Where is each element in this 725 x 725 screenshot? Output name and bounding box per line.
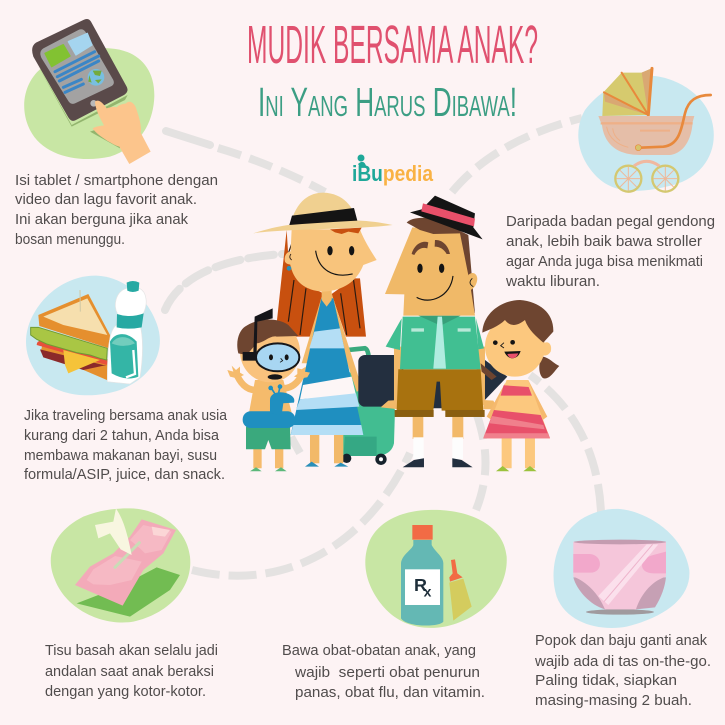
text: medicine: panas, obat flu, dan vitamin. (295, 685, 485, 701)
icon: medicine bottle: R (414, 575, 427, 595)
travel bag (358, 355, 507, 408)
text: diaper: wajib ada di tas on-the-go. (534, 654, 711, 670)
text: tablet: Isi tablet / smartphone dengan (15, 173, 218, 189)
father (381, 196, 498, 467)
text: tablet (15, 173, 218, 248)
panel: wet wipes (51, 508, 190, 623)
suitcase (342, 348, 395, 465)
text: tablet: Ini akan berguna jika anak (15, 212, 189, 228)
text: medicine: Bawa obat-obatan anak, yang (282, 643, 476, 659)
icon: medicine bottle (401, 525, 443, 626)
text: wet wipes: Tisu basah akan selalu jadi (45, 643, 218, 659)
icon: water bottle (107, 281, 146, 384)
text: diaper (534, 633, 711, 709)
icon: medicine bottle: x (424, 583, 432, 599)
logo: ibupedia: iBupedia (352, 161, 434, 186)
text: stroller (505, 214, 715, 290)
icon: wipes pack (75, 508, 180, 617)
icon: stroller (598, 68, 711, 192)
text: wet wipes (45, 643, 218, 700)
text: stroller: agar Anda juga bisa menikmati (506, 254, 703, 270)
blob: green (51, 508, 190, 623)
text: tablet: bosan menunggu. (15, 232, 125, 248)
panel: stroller (578, 68, 714, 192)
text: stroller: Daripada badan pegal gendong (506, 214, 715, 230)
panel: medicine (365, 510, 507, 628)
text: medicine: wajib seperti obat penurun (294, 665, 480, 681)
text: tablet: video dan lagu favorit anak. (15, 192, 197, 208)
icon: tablet and hand (32, 19, 151, 164)
blob: blue (26, 276, 160, 395)
panel: diaper (553, 509, 689, 628)
blob: blue (553, 509, 689, 628)
text: wet wipes: dengan yang kotor-kotor. (45, 684, 206, 700)
text: medicine (282, 643, 485, 701)
panel: tablet (24, 19, 154, 164)
subtitle: Ini Yang Harus Dibawa! (258, 79, 517, 125)
family illustration (227, 193, 559, 471)
dashed connector lines (165, 118, 601, 576)
blob: blue (578, 76, 714, 191)
icon: ointment tube (449, 559, 472, 621)
panel: food (26, 276, 160, 395)
text: stroller: anak, lebih baik bawa stroller (506, 234, 702, 250)
text: food: kurang dari 2 tahun, Anda bisa (24, 428, 220, 444)
icon: diaper (573, 540, 666, 615)
text: stroller: waktu liburan. (505, 274, 600, 290)
text: food: formula/ASIP, juice, dan snack. (24, 467, 225, 483)
mother (253, 193, 393, 467)
blob: green (365, 510, 507, 628)
text: wet wipes: andalan saat anak beraksi (45, 664, 214, 680)
text: food: membawa makanan bayi, susu (24, 448, 217, 464)
text: diaper: masing-masing 2 buah. (535, 693, 692, 709)
girl (481, 300, 559, 471)
icon: sandwich (31, 290, 113, 381)
text: diaper: Paling tidak, siapkan (535, 673, 677, 689)
boy with snorkel (227, 308, 310, 471)
text: food (24, 408, 228, 483)
text: food: Jika traveling bersama anak usia (24, 408, 228, 424)
text: diaper: Popok dan baju ganti anak (535, 633, 708, 649)
blob: green (24, 48, 154, 159)
